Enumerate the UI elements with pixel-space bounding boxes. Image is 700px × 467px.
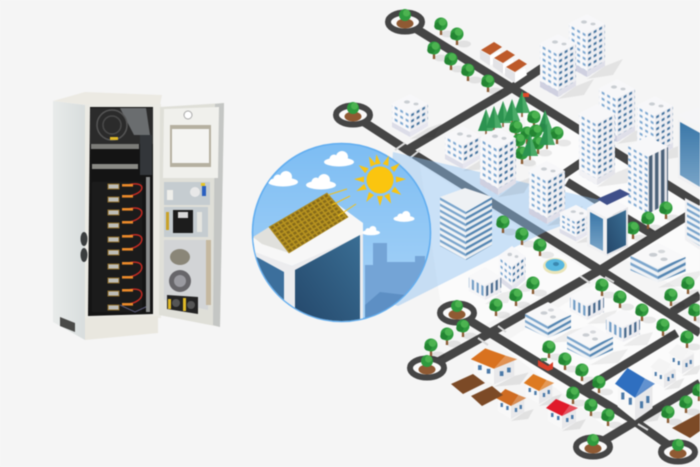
door window	[170, 111, 211, 167]
building: small offices left	[392, 94, 442, 139]
panel: battery energy storage cabinet	[53, 92, 224, 340]
clouds	[268, 151, 414, 235]
cabinet top	[53, 92, 162, 105]
side connectors	[80, 232, 88, 262]
city blocks	[420, 92, 700, 430]
small car on top road	[523, 93, 529, 97]
crosswalk markings	[395, 143, 648, 430]
building: wide windows office 2	[606, 309, 653, 346]
cul-de-sac: south-west upper	[440, 300, 474, 322]
office complex	[469, 246, 536, 304]
glass facade left	[256, 256, 285, 300]
door fans black units	[167, 295, 198, 314]
side vent	[60, 317, 75, 332]
building: office near forest	[445, 126, 495, 171]
skyline darker foreground	[365, 292, 404, 318]
lens sky	[252, 144, 430, 322]
building: tall white tower	[579, 104, 635, 187]
building roof side shade	[253, 227, 289, 253]
building: tower mid	[529, 161, 583, 226]
cabinet base	[85, 316, 158, 340]
solar panel	[269, 193, 348, 253]
house: red	[546, 399, 586, 431]
building roof	[252, 204, 364, 266]
road network	[353, 22, 700, 452]
road: south-west cross street	[427, 270, 600, 368]
magnifier lens: rooftop solar close-up	[250, 144, 430, 330]
power module with fan	[90, 108, 153, 175]
battery modules	[92, 177, 150, 312]
house: small orange	[524, 374, 562, 406]
glass facade dark	[295, 235, 360, 325]
building: tower behind	[599, 79, 653, 144]
cul-de-sac: south	[576, 434, 610, 456]
building: wide windows office 1	[570, 287, 617, 324]
road: lower right cross street	[593, 383, 700, 447]
house: blue roof	[615, 368, 665, 424]
road: east cross street	[600, 208, 700, 270]
road: upper cross street	[407, 68, 542, 150]
forest	[478, 91, 571, 166]
trees: southern blocks	[424, 276, 700, 428]
road: mid cross street	[583, 333, 677, 390]
trees: upper road	[427, 18, 502, 94]
building: tower right	[637, 96, 691, 161]
building: low office north-east	[630, 243, 700, 288]
building: tower centre-left	[480, 128, 534, 197]
houses: white annexes	[650, 344, 700, 390]
building: striped highlighted tower	[440, 188, 492, 260]
road: top diagonal	[405, 22, 700, 205]
building: tower top 1	[569, 14, 623, 79]
sun	[354, 154, 406, 206]
road: southern diagonal	[457, 313, 678, 452]
cul-de-sac: left	[336, 102, 370, 124]
building: low office centre	[525, 302, 586, 343]
door edge	[213, 103, 224, 327]
building: low office south	[567, 324, 628, 365]
road: right stub	[672, 295, 700, 312]
building front column	[255, 235, 364, 321]
fountain	[543, 258, 567, 274]
controller panel	[164, 207, 208, 237]
road: inner diagonal	[567, 182, 657, 237]
door lower unit with fan	[164, 240, 211, 310]
cul-de-sac: south-east	[661, 439, 695, 462]
open door	[159, 103, 224, 327]
fields	[451, 374, 700, 438]
car	[538, 358, 553, 371]
sheds with orange roofs	[480, 42, 527, 83]
building: small office by solar tower	[560, 205, 605, 243]
cabinet front frame	[85, 104, 161, 318]
city skyline	[364, 242, 426, 305]
building: striped tower far right	[685, 198, 700, 250]
cabinet side	[53, 101, 85, 340]
door upper panel	[163, 107, 219, 178]
sun rays hitting panel	[328, 189, 356, 216]
building: tower top 2	[540, 34, 594, 99]
cabinet interior	[88, 107, 153, 316]
house: large orange	[471, 348, 529, 387]
building: dark glass tower with solar roof	[587, 189, 630, 256]
road: short link	[560, 150, 600, 177]
zoom beam from lens to building	[380, 152, 600, 306]
building: tower with dark stripes	[628, 136, 668, 214]
cul-de-sac: south-west lower	[410, 355, 444, 378]
house: orange with door	[496, 389, 534, 421]
trees: in beam	[496, 216, 554, 258]
trees: east corner	[626, 202, 680, 242]
building: blue glass tower far right	[677, 107, 700, 190]
breaker panel	[164, 182, 210, 205]
cul-de-sac: top	[388, 9, 422, 32]
road: long central diagonal	[353, 115, 700, 333]
